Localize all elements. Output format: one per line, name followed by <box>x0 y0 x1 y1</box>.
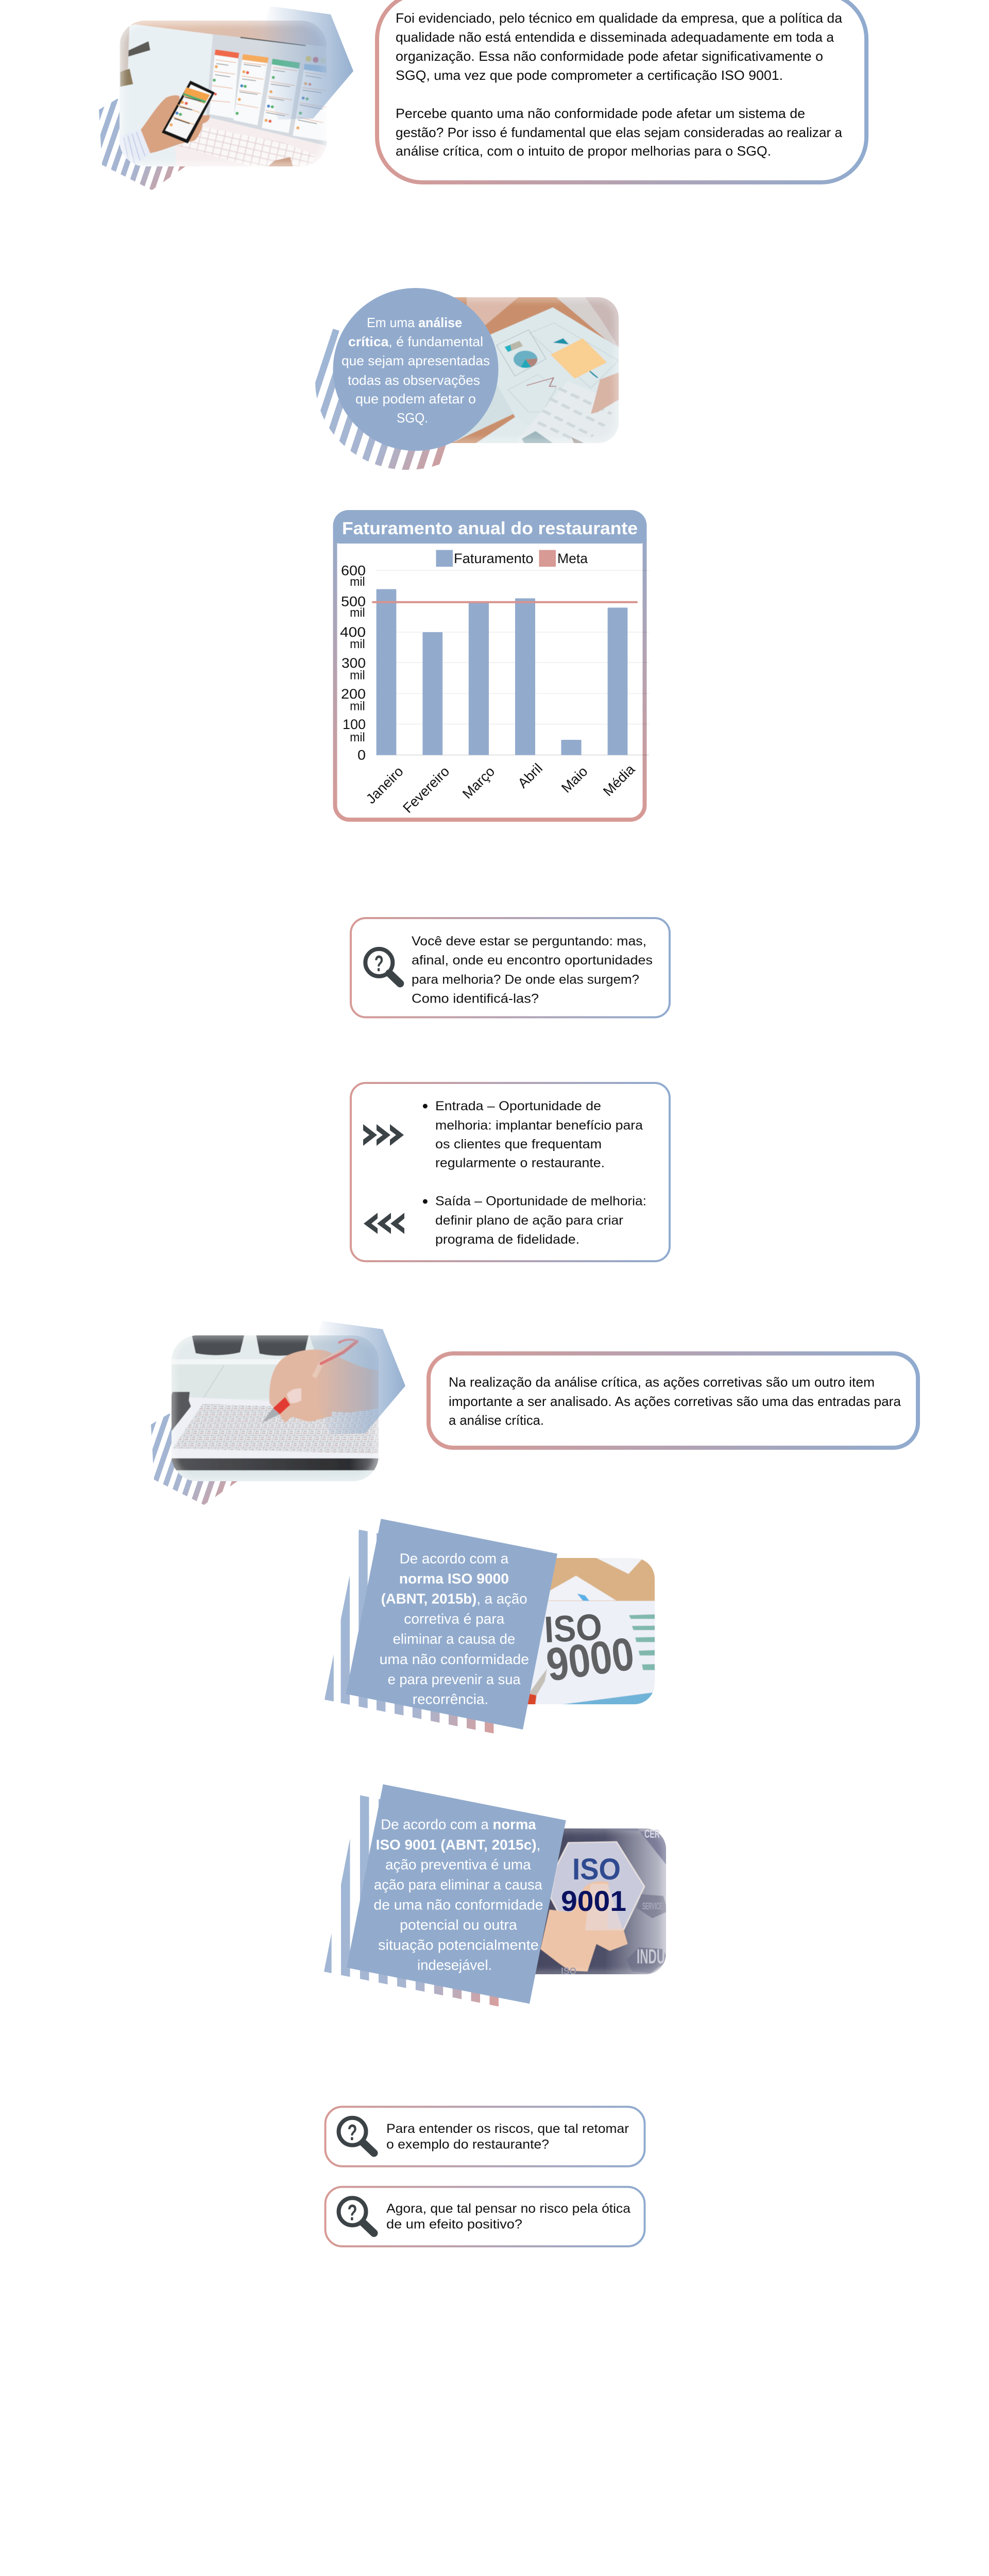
photo: hand holding phone in front of laptop <box>117 19 330 168</box>
callout: risco efeito positivo <box>326 2187 645 2246</box>
text block: Agora, que tal pensar no risco pela ótica <box>386 2201 630 2216</box>
text block <box>386 2201 630 2232</box>
x axis labels <box>363 760 638 816</box>
circle callout: SGQ. <box>397 410 428 426</box>
legend: Faturamento <box>454 551 534 566</box>
tilted callout: De acordo com a norma <box>381 1817 536 1833</box>
circle callout: crítica, é fundamental <box>348 334 483 349</box>
tilted callout: (ABNT, 2015b), a ação <box>381 1590 527 1606</box>
photo lettering: INDU <box>637 1945 665 1968</box>
section: ações corretivas <box>151 1321 920 1505</box>
photo lettering <box>543 1606 637 1691</box>
bullet: saída: definir plano de ação para criar <box>435 1213 623 1228</box>
y axis labels: mil <box>350 575 365 589</box>
section: norma ISO 9000 <box>325 1519 658 1741</box>
stripes decoration <box>151 1414 237 1505</box>
circle callout: todas as observações <box>348 372 480 388</box>
x axis labels: Média <box>600 761 638 799</box>
tilted callout: e para prevenir a sua <box>388 1671 521 1687</box>
icon: magnifier with question mark: ? <box>374 951 384 976</box>
y axis labels: mil <box>350 637 365 651</box>
bullet: saída <box>423 1194 646 1247</box>
text box: política da qualidade: organização. Essa não conformidade pode afetar significativamente o <box>396 48 823 64</box>
photo lettering: 9000 <box>543 1628 637 1691</box>
tilted callout: eliminar a causa de <box>393 1631 515 1647</box>
photo lettering: ISO <box>561 1966 576 1976</box>
y axis labels: 0 <box>357 747 366 762</box>
text block: para melhoria? De onde elas surgem? <box>412 973 639 987</box>
icon: arrows right <box>363 1124 404 1146</box>
photo: ISO 9000 paper <box>527 1558 655 1704</box>
icon: magnifier with question mark: ? <box>347 2120 357 2145</box>
tilted callout <box>346 1519 557 1730</box>
photo lettering: 9001 <box>561 1885 626 1917</box>
y axis labels: 200 <box>341 686 366 702</box>
bullet: saída: programa de fidelidade. <box>435 1232 579 1247</box>
photo: ISO 9001 hexagon with hand <box>535 1828 666 1974</box>
photo: desk with charts and calculator <box>451 297 619 443</box>
y axis labels: mil <box>350 606 365 620</box>
text box: ações corretivas: Na realização da análise crítica, as ações corretivas são um outro item <box>449 1375 875 1390</box>
y axis labels: 300 <box>342 655 366 671</box>
text box: política da qualidade: Percebe quanto uma não conformidade pode afetar um sistema de <box>396 106 805 121</box>
y axis labels: mil <box>350 669 365 682</box>
text box: política da qualidade: Foi evidenciado, pelo técnico em qualidade da empresa, que a política da <box>396 10 843 26</box>
tilted callout: De acordo com a <box>400 1550 509 1566</box>
x axis labels: Maio <box>558 764 591 796</box>
legend: Meta <box>557 551 588 566</box>
stripes decoration <box>322 1788 499 2014</box>
photo lettering: ISO <box>572 1853 621 1886</box>
tilted callout: recorrência. <box>413 1691 488 1707</box>
x axis labels: Fevereiro <box>400 764 452 816</box>
section: norma ISO 9001 <box>322 1784 669 2014</box>
chart frame <box>335 512 645 820</box>
tilted callout: uma não conformidade <box>380 1651 529 1667</box>
circle callout <box>333 288 499 451</box>
callout: riscos exemplo do restaurante <box>326 2107 645 2166</box>
text box: política da qualidade <box>377 0 866 182</box>
tilted callout: corretiva é para <box>404 1611 505 1627</box>
tilted callout <box>347 1784 566 2004</box>
tilted callout: ISO 9001 (ABNT, 2015c), <box>376 1837 540 1853</box>
panel: entrada e saída <box>351 1083 670 1261</box>
photo lettering: SERVICE <box>642 1901 662 1911</box>
x axis labels: Março <box>459 764 498 802</box>
legend <box>436 550 588 567</box>
stripes decoration <box>99 99 185 190</box>
stripes decoration <box>325 1525 493 1741</box>
meta line <box>373 601 637 603</box>
chart header title: Faturamento anual do restaurante <box>342 519 638 538</box>
photo: hand with red pen on spreadsheet <box>170 1333 381 1483</box>
icon: magnifier with question mark <box>339 2118 374 2153</box>
stripes decoration <box>315 329 446 470</box>
bullet: entrada: os clientes que frequentam <box>435 1137 602 1151</box>
icon: magnifier with question mark <box>365 949 400 984</box>
x axis labels: Abril <box>515 760 545 791</box>
bullet: entrada: Entrada – Oportunidade de <box>435 1099 601 1113</box>
circle callout: que sejam apresentadas <box>342 353 490 368</box>
tilted callout: de uma não conformidade <box>373 1897 543 1913</box>
photo lettering <box>561 1827 665 1976</box>
text block: Para entender os riscos, que tal retomar <box>386 2122 629 2136</box>
hexagon overlay <box>304 1321 405 1434</box>
bullet: entrada: regularmente o restaurante. <box>435 1156 605 1171</box>
text box: política da qualidade: qualidade não está entendida e disseminada adequadamente em toda a <box>396 29 834 45</box>
y axis labels: mil <box>350 700 365 714</box>
callout: oportunidades para melhoria <box>351 918 670 1017</box>
text block: Como identificá-las? <box>412 991 539 1006</box>
text box: ações corretivas: a análise crítica. <box>449 1413 544 1428</box>
bullet: saída: Saída – Oportunidade de melhoria: <box>435 1194 646 1208</box>
icon: magnifier with question mark <box>339 2198 374 2233</box>
y axis labels: mil <box>350 731 365 744</box>
text block: afinal, onde eu encontro oportunidades <box>412 953 653 968</box>
y axis labels: 400 <box>340 624 366 640</box>
panel: bar chart faturamento anual <box>333 510 649 820</box>
tilted callout: ação preventiva é uma <box>385 1857 531 1873</box>
x axis labels: Janeiro <box>363 764 406 807</box>
y axis labels <box>340 563 366 762</box>
circle callout: que podem afetar o <box>355 391 476 406</box>
circle callout: Em uma análise <box>367 315 462 330</box>
tilted callout: potencial ou outra <box>400 1917 518 1933</box>
tilted callout: indesejável. <box>417 1957 492 1973</box>
text block <box>386 2122 629 2152</box>
text block <box>412 934 653 1006</box>
bullet: entrada <box>423 1099 643 1171</box>
text box: política da qualidade: análise crítica, com o intuito de propor melhorias para o SGQ. <box>396 143 771 159</box>
bullet: entrada: melhoria: implantar benefício para <box>435 1118 643 1132</box>
y axis labels: 600 <box>341 563 366 578</box>
y axis labels: 500 <box>341 594 366 609</box>
tilted callout: norma ISO 9000 <box>399 1570 509 1586</box>
chart header title <box>333 510 647 544</box>
y axis labels: 100 <box>343 717 366 732</box>
hexagon overlay <box>252 6 353 120</box>
tilted callout: ação para eliminar a causa <box>374 1877 542 1893</box>
icon: magnifier with question mark: ? <box>347 2200 357 2225</box>
section: política da qualidade <box>99 0 868 190</box>
text box: política da qualidade: SGQ, uma vez que pode comprometer a certificação ISO 9001. <box>396 67 783 83</box>
photo lettering: ISO <box>543 1606 603 1651</box>
icon: arrows left <box>364 1213 404 1234</box>
tilted callout: situação potencialmente <box>378 1937 539 1953</box>
text block: de um efeito positivo? <box>386 2217 522 2232</box>
text box: política da qualidade: gestão? Por isso é fundamental que elas sejam consideradas ao realizar a <box>396 125 843 140</box>
text box: ações corretivas <box>429 1353 918 1448</box>
text box: ações corretivas: importante a ser analisado. As ações corretivas são uma das entradas para <box>449 1394 901 1409</box>
text block: o exemplo do restaurante? <box>386 2138 549 2152</box>
photo lettering: CER <box>644 1827 660 1840</box>
bars <box>377 589 627 755</box>
text block: Você deve estar se perguntando: mas, <box>412 934 646 948</box>
section: análise crítica <box>315 288 619 470</box>
